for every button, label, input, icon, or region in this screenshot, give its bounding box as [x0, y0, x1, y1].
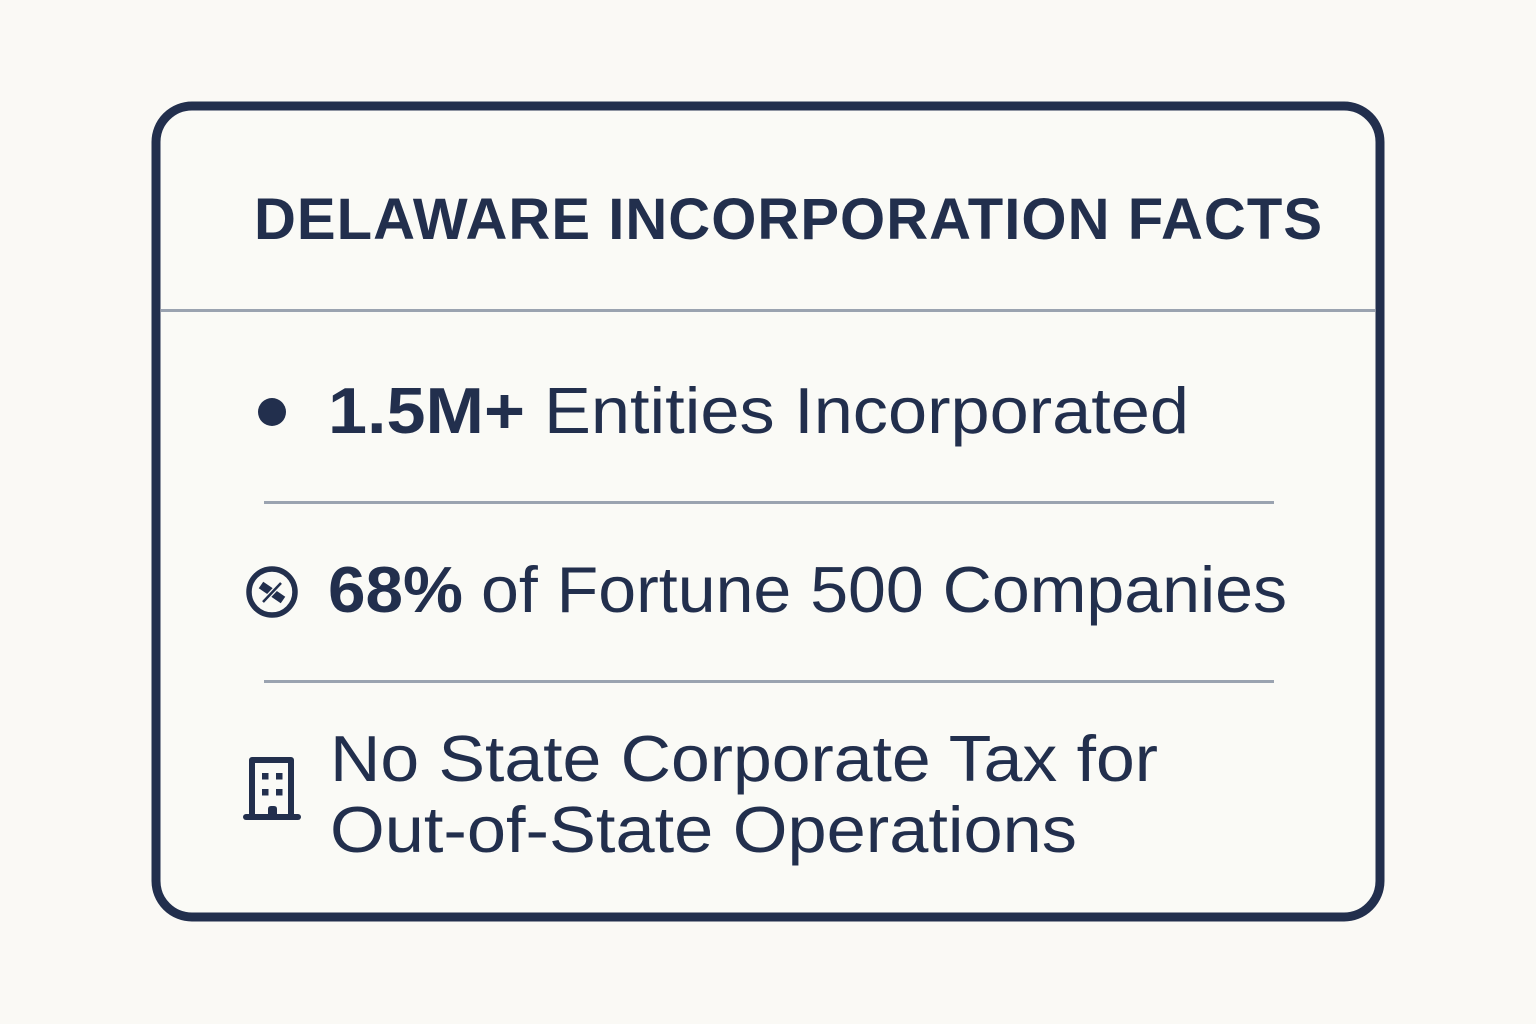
fact: entities incorporated: 1.5M+: [328, 374, 525, 447]
icon: office building: [246, 760, 298, 817]
fact: no state corporate tax: No State Corporate Tax for: [330, 722, 1158, 795]
fact: entities incorporated: [328, 374, 1189, 447]
icon: bullet dot: [258, 398, 286, 426]
panel: facts card: [156, 106, 1380, 917]
fact: no state corporate tax: [330, 722, 1158, 866]
fact: fortune 500: of Fortune 500 Companies: [481, 553, 1287, 626]
heading: DELAWARE INCORPORATION FACTS: [254, 187, 1322, 252]
icon: crossed tools in circle: [249, 569, 295, 615]
fact: fortune 500: 68%: [328, 553, 463, 626]
fact: no state corporate tax: Out-of-State Operations: [330, 793, 1077, 866]
fact: entities incorporated: Entities Incorporated: [544, 374, 1189, 447]
